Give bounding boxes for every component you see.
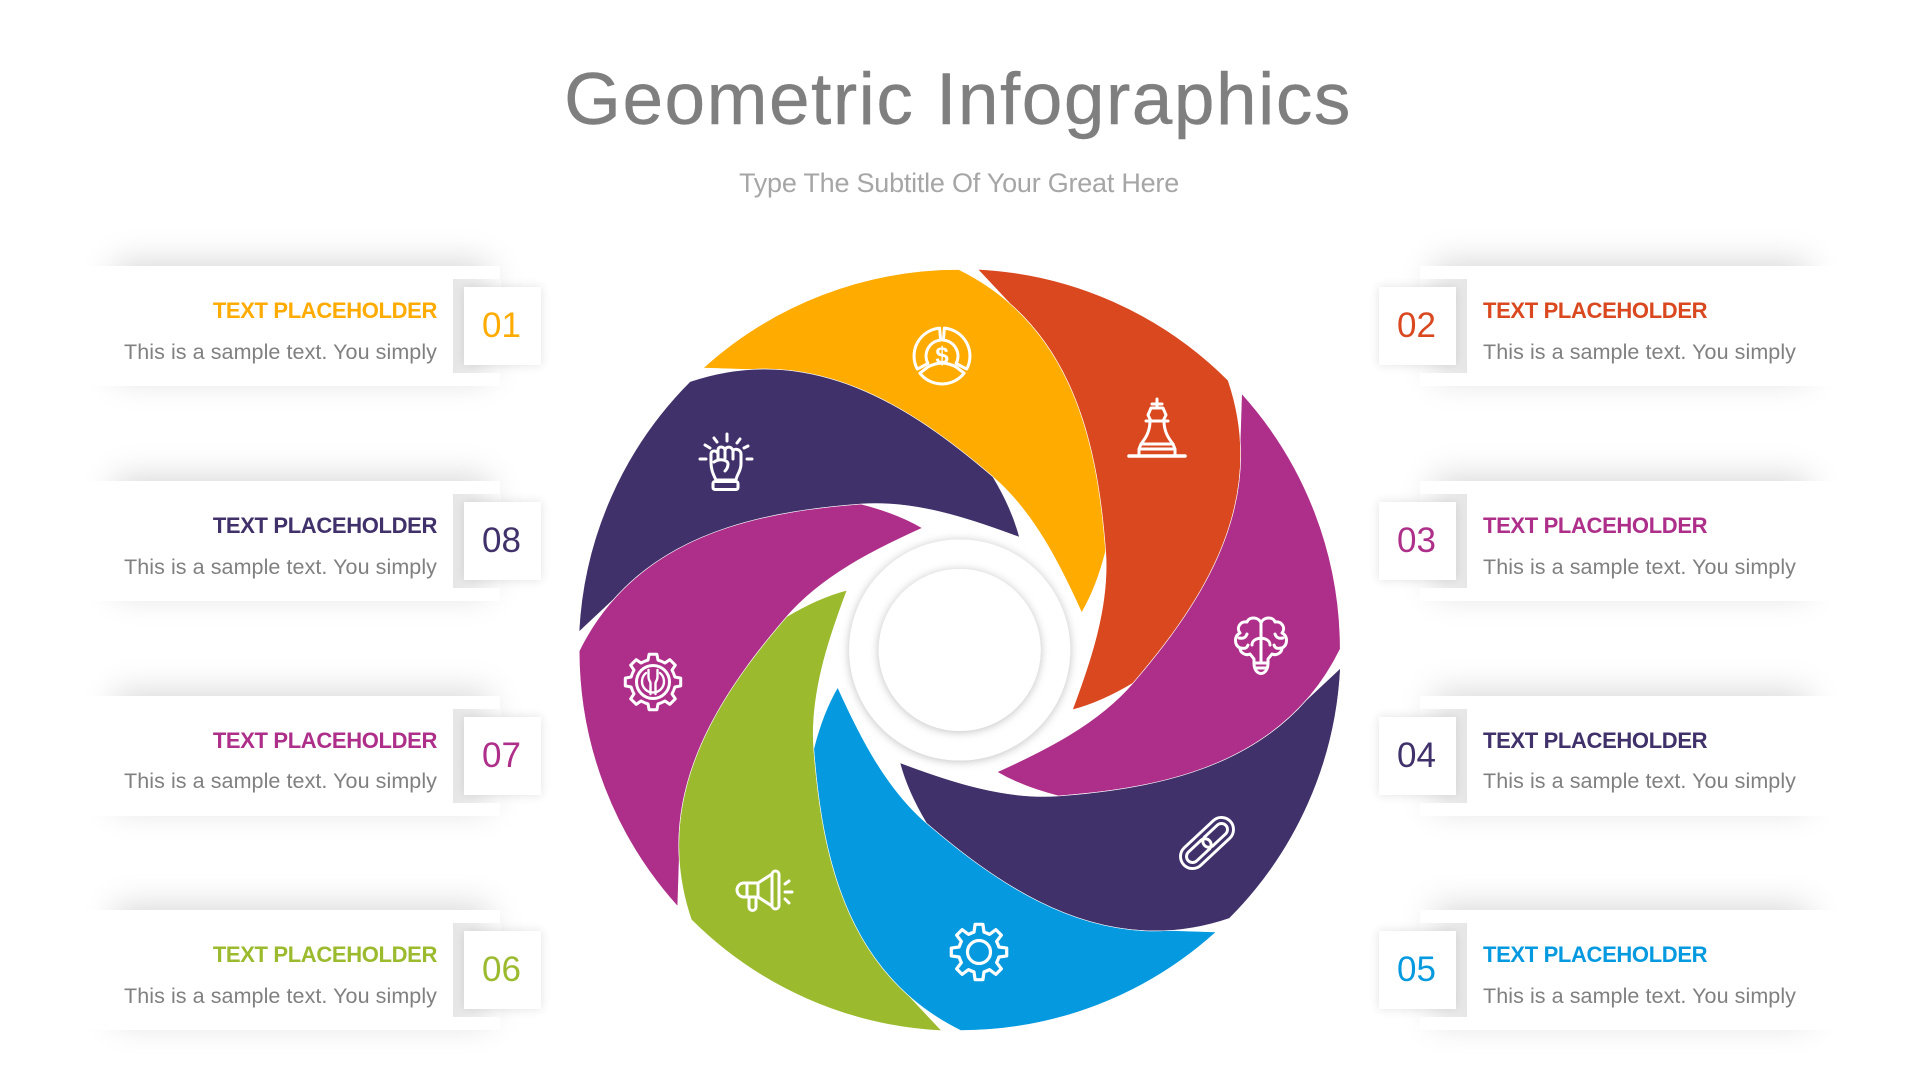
- title: Geometric Infographics: [564, 59, 1352, 140]
- text 01: This is a sample text. You simply: [124, 340, 437, 364]
- icon: chain link: [1176, 812, 1238, 874]
- number 04: [1379, 716, 1456, 794]
- number 05: 05: [1397, 950, 1436, 989]
- heading 08: TEXT PLACEHOLDER: [213, 513, 437, 538]
- heading 07: TEXT PLACEHOLDER: [213, 728, 437, 752]
- number 08: [464, 502, 541, 580]
- segment 04: dark purple: [883, 495, 1410, 1022]
- panel: item 06: [109, 893, 544, 1035]
- panel: item 08: [109, 464, 544, 606]
- subtitle: Type The Subtitle Of Your Great Here: [739, 168, 1179, 198]
- text 08: This is a sample text. You simply: [124, 554, 437, 578]
- number 02: [1379, 287, 1456, 365]
- number 07: [464, 716, 541, 794]
- text 03: This is a sample text. You simply: [1483, 554, 1796, 578]
- text 02: This is a sample text. You simply: [1483, 340, 1796, 364]
- segment 03: magenta: [997, 394, 1340, 796]
- segment 08: dark purple: [509, 278, 1036, 805]
- icon: wrench gear: [625, 654, 681, 710]
- number 08: 08: [482, 521, 521, 560]
- number 05: [1379, 931, 1456, 1009]
- number 03: 03: [1397, 521, 1436, 560]
- panel: item 03: [1376, 464, 1814, 606]
- segment 07: magenta: [579, 504, 922, 906]
- heading 04: TEXT PLACEHOLDER: [1483, 728, 1707, 752]
- panel: item 01: [109, 249, 544, 391]
- heading 01: TEXT PLACEHOLDER: [213, 298, 437, 323]
- number 03: [1379, 502, 1456, 580]
- segment 02: red: [805, 200, 1332, 727]
- text 06: This is a sample text. You simply: [124, 984, 437, 1008]
- icon: raised fist: [700, 434, 752, 490]
- panel: item 04: [1376, 679, 1814, 821]
- icon: brain bulb: [1236, 618, 1286, 674]
- segment 05: blue: [814, 687, 1216, 1030]
- segment 06: green: [587, 573, 1115, 1080]
- center: outer ring: [849, 540, 1070, 760]
- icon: money target: $: [935, 342, 949, 370]
- number 01: [464, 287, 541, 365]
- heading 03: TEXT PLACEHOLDER: [1483, 513, 1707, 538]
- number 06: [464, 931, 541, 1009]
- segment 01: orange: [703, 270, 1106, 613]
- text 04: This is a sample text. You simply: [1483, 769, 1796, 793]
- panel: item 05: [1376, 893, 1814, 1035]
- number 01: 01: [482, 306, 521, 345]
- panel: item 02: [1376, 249, 1814, 391]
- icon: chess king: [1129, 399, 1185, 456]
- number 06: 06: [482, 950, 521, 989]
- icon: gear: [951, 924, 1007, 980]
- heading 05: TEXT PLACEHOLDER: [1483, 942, 1707, 967]
- text 07: This is a sample text. You simply: [124, 769, 437, 793]
- panel: item 07: [109, 679, 544, 821]
- text 05: This is a sample text. You simply: [1483, 984, 1796, 1008]
- number 04: 04: [1397, 736, 1436, 774]
- icon: megaphone: [737, 871, 792, 910]
- heading 02: TEXT PLACEHOLDER: [1483, 298, 1707, 323]
- center: inner circle: [879, 569, 1041, 731]
- number 02: 02: [1397, 306, 1436, 345]
- heading 06: TEXT PLACEHOLDER: [213, 942, 437, 967]
- number 07: 07: [482, 736, 521, 774]
- icon: money target: [914, 328, 970, 384]
